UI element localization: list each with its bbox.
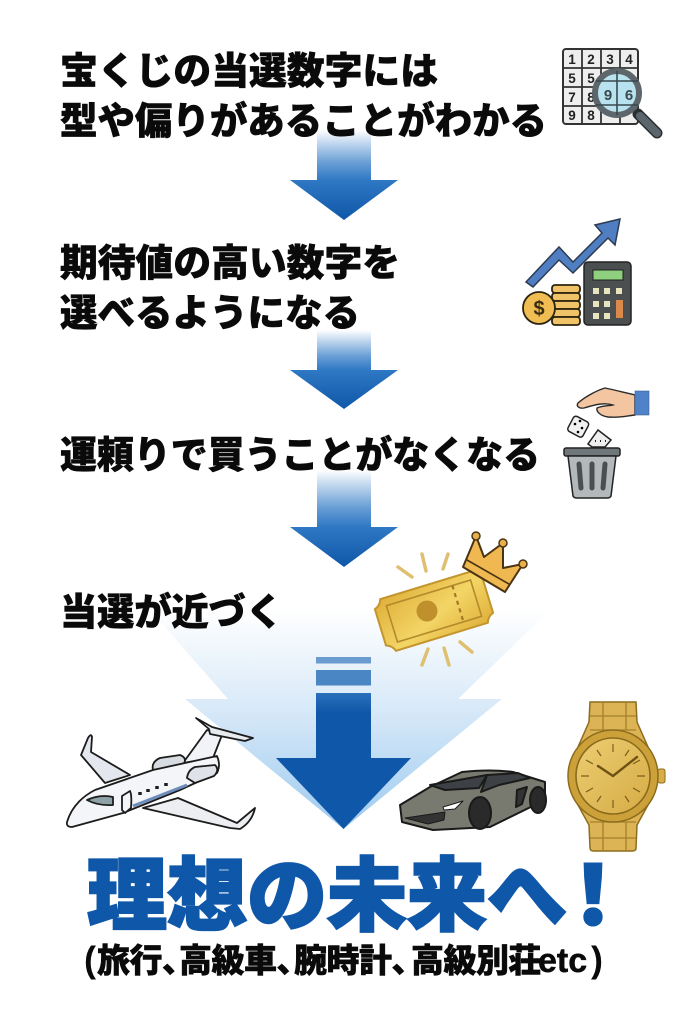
large pale arrow xyxy=(150,610,550,829)
icon: number grid with magnifier: 9 xyxy=(568,108,576,123)
icon: number grid with magnifier xyxy=(563,49,657,133)
arrow: step 3 to 4 xyxy=(290,470,398,567)
icon: golden ticket with crown xyxy=(373,532,527,665)
icon: number grid with magnifier: 8 xyxy=(587,90,595,105)
icon: rising arrow, coins and calculator xyxy=(523,219,631,325)
icon: sports car xyxy=(400,770,546,830)
icon: number grid with magnifier: 8 xyxy=(587,108,595,123)
icon: number grid with magnifier: 5 xyxy=(587,71,595,86)
icon: number grid with magnifier: 7 xyxy=(568,90,576,105)
subtitle: 旅行、 xyxy=(97,942,194,979)
heading: step 2 xyxy=(60,242,400,334)
main title: ！ xyxy=(553,852,633,941)
central dark blue arrow xyxy=(276,657,411,829)
icon: gold watch xyxy=(568,702,665,851)
arrow: step 1 to 2 xyxy=(290,130,398,220)
icon: number grid with magnifier: 3 xyxy=(606,52,614,67)
subtitle: ) xyxy=(591,939,603,980)
heading: step 2: 期待値の高い数字を xyxy=(60,242,400,284)
arrow: step 2 to 3 xyxy=(290,330,398,409)
icon: number grid with magnifier: 2 xyxy=(587,52,595,67)
subtitle: 高級別荘 xyxy=(411,942,541,979)
heading: step 1 xyxy=(60,50,547,142)
icon: private jet xyxy=(67,718,255,829)
heading: step 1: 型や偏りがあることがわかる xyxy=(60,100,547,142)
subtitle: 腕時計、 xyxy=(294,942,424,979)
icon: number grid with magnifier: 6 xyxy=(625,87,633,104)
subtitle: ( xyxy=(84,939,96,980)
icon: number grid with magnifier: 4 xyxy=(625,52,633,67)
icon: number grid with magnifier: 9 xyxy=(604,87,612,104)
icon: number grid with magnifier: 1 xyxy=(568,52,576,67)
heading: step 1: 宝くじの当選数字には xyxy=(60,50,438,92)
icon: rising arrow, coins and calculator: $ xyxy=(533,298,545,320)
heading: step 2: 選べるようになる xyxy=(60,292,360,334)
heading: step 3: 運頼りで買うことがなくなる xyxy=(60,434,540,476)
subtitle: 高級車、 xyxy=(179,942,309,979)
icon: hand dropping dice in bin xyxy=(564,388,649,498)
icon: number grid with magnifier: 5 xyxy=(568,71,576,86)
subtitle: etc xyxy=(538,942,587,980)
heading: step 4: 当選が近づく xyxy=(60,591,283,633)
subtitle xyxy=(84,939,603,980)
main title: 理想の未来へ xyxy=(87,852,567,941)
